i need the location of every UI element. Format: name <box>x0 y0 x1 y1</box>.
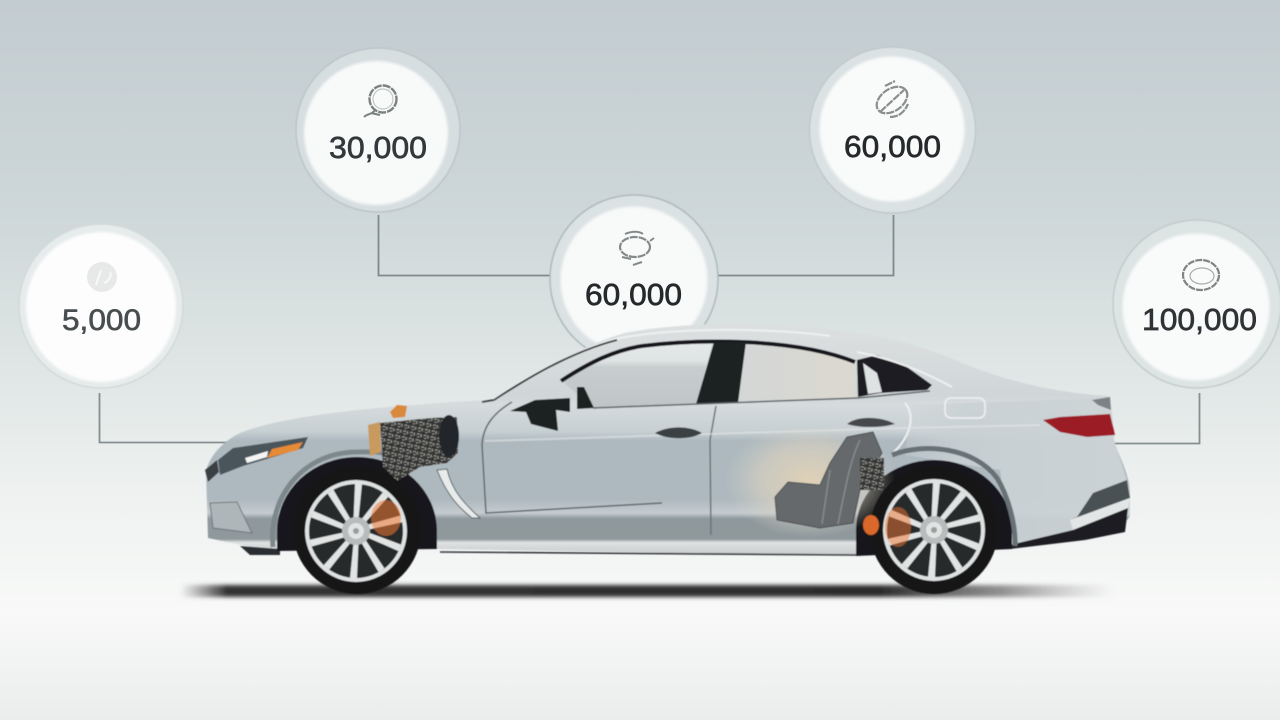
engine tan hoses <box>368 422 381 456</box>
rim: rear <box>885 481 983 579</box>
milestone: 30,000 <box>296 48 460 212</box>
grille edge <box>205 460 219 482</box>
rear diffuser <box>1070 480 1130 520</box>
car: cutaway sedan side view <box>205 324 1130 594</box>
icon: faded service symbol <box>87 262 117 292</box>
mileage label: 60,000 <box>844 129 941 164</box>
front chin <box>240 546 280 555</box>
connector: 5,000 <box>100 393 232 442</box>
milestone: 60,000 centre <box>550 195 718 363</box>
rear door handle <box>847 418 895 427</box>
connector: 30,000 <box>378 215 552 276</box>
quarter window <box>857 355 932 397</box>
icon: belt loop <box>872 81 912 119</box>
front door handle <box>655 427 702 438</box>
engine orange top <box>390 405 407 418</box>
seat seam <box>822 440 860 524</box>
mileage label: 5,000 <box>62 304 141 337</box>
rear window <box>738 345 855 403</box>
ground shadow <box>180 585 1115 597</box>
mileage label: 30,000 <box>329 130 427 165</box>
car body <box>206 324 1130 556</box>
engine cutaway <box>380 417 458 481</box>
sill line <box>440 552 857 555</box>
headlight DRL <box>245 451 268 463</box>
front fender trim <box>273 452 410 547</box>
wheel arch: rear <box>856 460 1012 556</box>
lower grille <box>210 502 252 533</box>
icon: oil cap ring <box>1183 260 1219 290</box>
front window <box>562 343 712 408</box>
engine end cap <box>439 415 459 457</box>
icon: hose ring <box>364 86 396 117</box>
connector: 100,000 <box>1110 393 1200 444</box>
rear roof trim <box>857 352 952 387</box>
headlight <box>218 437 308 475</box>
spoiler lip <box>1092 397 1111 410</box>
rear quarter highlight <box>905 398 1130 548</box>
mirror base <box>577 387 594 409</box>
wheel arch: front <box>277 457 437 551</box>
rear mechanical block <box>860 458 884 490</box>
rear bumper light strip <box>1070 498 1130 530</box>
body crease highlight <box>485 425 1040 441</box>
fuel door <box>945 398 985 418</box>
roof trim <box>493 330 830 400</box>
tyre: front <box>293 466 421 594</box>
mileage label: 100,000 <box>1142 302 1257 337</box>
brake glow: front <box>371 500 401 536</box>
rear lower valance <box>1010 508 1128 549</box>
door seam: rear <box>893 403 911 453</box>
wing mirror <box>510 398 570 431</box>
rear glow <box>725 422 895 538</box>
front door seam <box>482 402 662 513</box>
windshield edge <box>482 340 617 402</box>
tail light <box>1043 414 1115 437</box>
B-pillar <box>696 342 746 404</box>
mileage label: 60,000 <box>585 277 682 312</box>
milestone: 60,000 right <box>810 47 976 213</box>
window frame top <box>561 342 855 381</box>
rear fender trim <box>892 449 1015 546</box>
headlight amber <box>267 442 303 458</box>
milestone: 5,000 <box>19 224 183 388</box>
rim: front <box>307 482 405 580</box>
side vent <box>437 469 480 518</box>
connector: 60,000 right <box>716 215 894 276</box>
milestone: 100,000 <box>1113 220 1280 388</box>
brake glow: rear <box>885 507 911 547</box>
door seam: B <box>710 406 716 535</box>
caliper: rear <box>863 515 879 535</box>
quarter window glass <box>863 363 882 394</box>
icon: oil can <box>620 232 654 265</box>
seat cutaway <box>775 432 882 528</box>
belt line <box>593 391 930 408</box>
tyre: rear <box>870 466 998 594</box>
